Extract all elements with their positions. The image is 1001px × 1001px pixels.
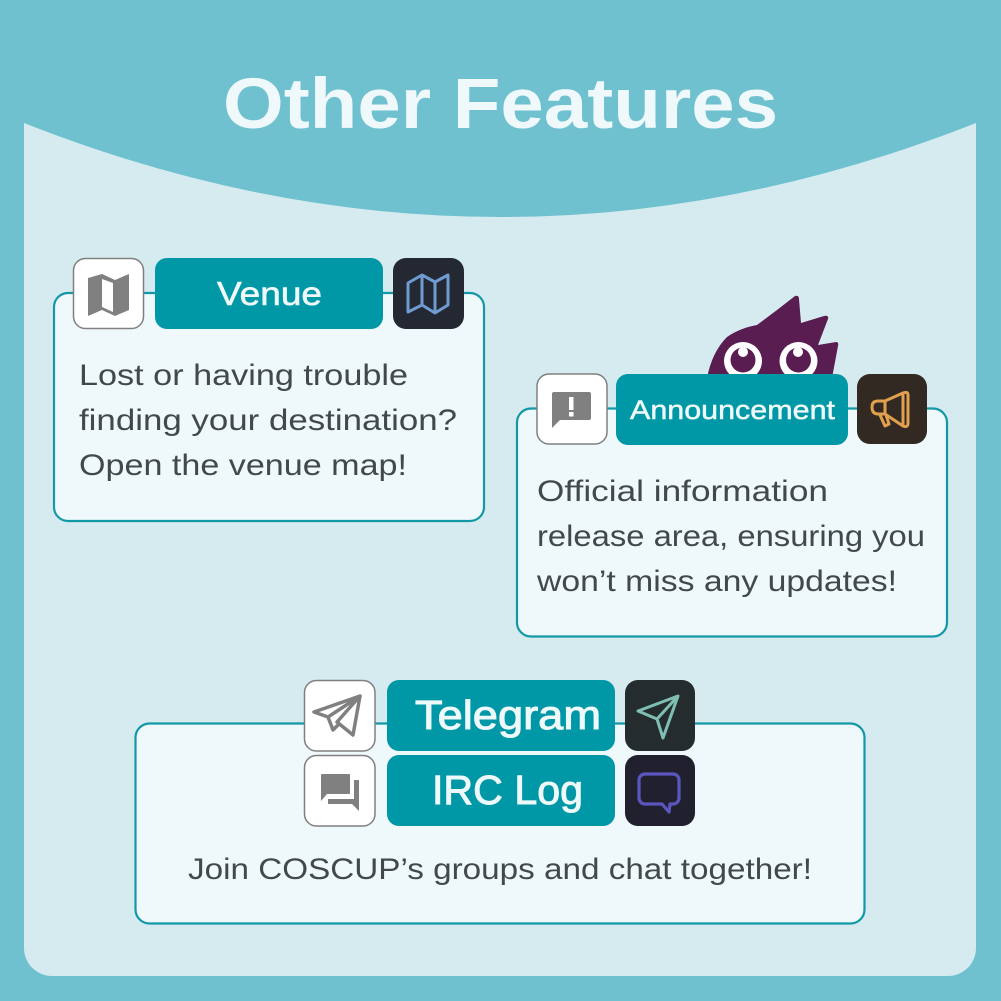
announcement card [517,408,947,636]
venue description: finding your destination? [79,404,457,437]
announcement description [536,475,925,598]
icon: gray paper plane [304,680,375,751]
venue label [155,258,383,329]
icon: gray alert bubble [537,374,607,444]
icon: gray chat bubbles [304,756,375,826]
announcement label [616,374,848,445]
icon: megaphone [857,374,927,444]
announcement description: release area, ensuring you [537,520,925,553]
icon: dark map [393,258,464,329]
IRC log label [387,755,615,826]
announcement description: Official information [537,475,828,508]
telegram label [387,680,615,751]
venue description: Lost or having trouble [79,359,408,392]
announcement description: won’t miss any updates! [536,565,897,598]
venue description [79,359,457,482]
icon: dark chat bubble [625,755,695,826]
icon: gray folded map [74,258,144,328]
venue label: Venue [217,275,322,312]
title: Other Features [223,65,778,144]
panel: venue [54,258,484,521]
IRC log label: IRC Log [432,767,583,813]
venue card [54,293,484,521]
panel: announcement [517,374,947,636]
icon: dark paper plane [625,680,695,751]
chat description: Join COSCUP’s groups and chat together! [188,853,812,886]
panel: telegram and IRC log [136,680,864,924]
chat card [136,724,864,924]
announcement label: Announcement [630,395,836,425]
venue description: Open the venue map! [79,449,407,482]
telegram label: Telegram [415,692,601,738]
mascot [707,296,838,380]
